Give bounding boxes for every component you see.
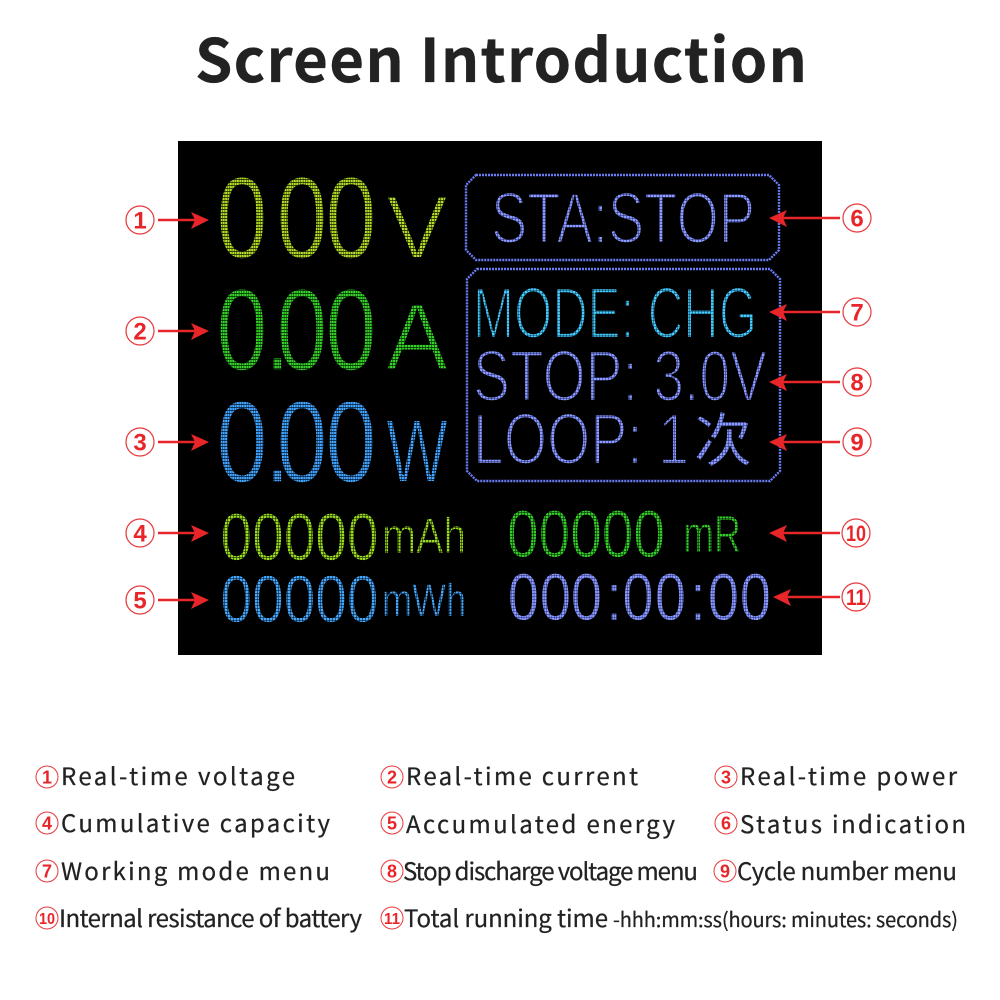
legend item 4: Cumulative capacity xyxy=(61,804,330,839)
callout 9: 9 xyxy=(850,430,864,456)
legend item 7: 7 xyxy=(42,862,52,882)
loop line: LOOP: 1 xyxy=(473,400,689,480)
settings box xyxy=(467,269,780,481)
callout 2: 2 xyxy=(133,318,147,346)
callout 4: 4 xyxy=(133,520,147,548)
capacity reading: 00000 xyxy=(220,500,378,575)
legend item 6: Status indication xyxy=(740,805,966,840)
legend item 5: 5 xyxy=(387,814,397,834)
title: Screen Introduction xyxy=(195,13,807,100)
callout 6 xyxy=(769,204,871,232)
legend item 6: 6 xyxy=(721,814,731,834)
legend item 10: Internal resistance of battery xyxy=(59,899,362,934)
callout 4 xyxy=(126,519,209,548)
power reading xyxy=(216,378,448,508)
callout 6: 6 xyxy=(850,206,864,232)
legend item 11 xyxy=(381,899,958,934)
legend item 7: Working mode menu xyxy=(61,852,330,887)
current reading: A xyxy=(386,284,448,391)
callout 8 xyxy=(769,368,871,396)
callout 10: 10 xyxy=(846,521,866,546)
resistance reading: 00000 xyxy=(507,497,665,572)
legend item 2: Real-time current xyxy=(406,757,638,792)
resistance reading: mR xyxy=(683,506,741,564)
running time reading: 000:00:00 xyxy=(508,560,771,635)
callout 3 xyxy=(126,428,209,456)
legend item 2: 2 xyxy=(387,768,397,788)
callout 11: 11 xyxy=(846,585,866,610)
mode line: MODE: CHG xyxy=(473,274,757,354)
legend item 8: Stop discharge voltage menu xyxy=(403,852,698,887)
legend item 4: 4 xyxy=(42,814,52,834)
callout 3: 3 xyxy=(133,430,147,456)
callout 2 xyxy=(126,317,209,346)
callout 11 xyxy=(773,583,870,611)
capacity reading: mAh xyxy=(382,508,466,564)
legend item 9: 9 xyxy=(720,862,730,882)
power reading: W xyxy=(386,402,448,502)
callout 9 xyxy=(769,428,871,456)
legend item 3: Real-time power xyxy=(740,757,958,792)
legend item 5: Accumulated energy xyxy=(406,805,675,840)
voltage reading: V xyxy=(386,178,448,278)
current reading xyxy=(216,266,448,396)
legend item 9: Cycle number menu xyxy=(737,852,957,887)
energy reading: 00000 xyxy=(220,562,378,637)
status box: STA:STOP xyxy=(491,179,755,259)
callout 1: 1 xyxy=(133,208,147,234)
voltage reading xyxy=(216,154,448,284)
callout 5: 5 xyxy=(133,588,147,614)
legend item 3: 3 xyxy=(721,768,731,788)
power reading: 0.00 xyxy=(216,378,376,508)
callout 7: 7 xyxy=(850,300,864,326)
callout 7 xyxy=(769,298,871,326)
legend item 10: 10 xyxy=(39,911,55,928)
callout 5 xyxy=(126,586,209,614)
panel: LCD screen xyxy=(178,141,822,655)
current reading: 0.00 xyxy=(216,266,376,396)
legend item 1: Real-time voltage xyxy=(61,757,295,792)
legend xyxy=(36,757,966,934)
voltage reading: 000 xyxy=(216,154,376,284)
callout 8: 8 xyxy=(850,370,864,396)
legend item 11: Total running time xyxy=(404,899,608,934)
legend item 11: 11 xyxy=(384,911,400,928)
callout 1 xyxy=(126,206,209,234)
stop voltage line: STOP: 3.0V xyxy=(473,337,767,417)
loop line: 次 xyxy=(694,409,752,474)
callout 10 xyxy=(769,519,870,547)
energy reading: mWh xyxy=(382,574,466,626)
legend item 1: 1 xyxy=(42,768,52,788)
legend item 11: -hhh:mm:ss(hours: minutes: seconds) xyxy=(613,904,958,933)
legend item 8: 8 xyxy=(387,862,397,882)
